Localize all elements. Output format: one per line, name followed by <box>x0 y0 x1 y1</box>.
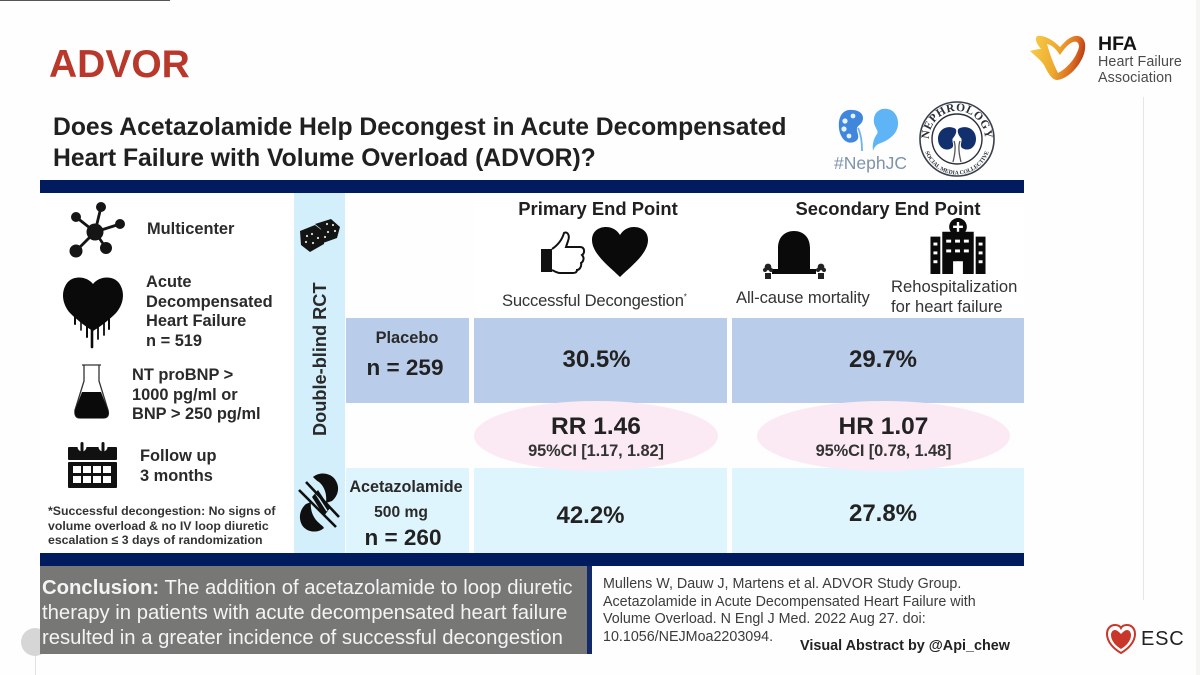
text: conclusion: resulted in a greater incidence of successful decongestion <box>42 627 563 649</box>
icon: dice <box>300 219 340 252</box>
text: follow up <box>140 447 216 485</box>
label: Rehospitalization for heart failure: Rehospitalization <box>891 277 1017 296</box>
text: 95%CI secondary: 95%CI [0.78, 1.48] <box>816 442 951 460</box>
logo text: Heart Failure Association <box>1098 54 1182 86</box>
panel: endpoint headers <box>474 193 1024 317</box>
text: acute decompensated heart failure: Heart Failure <box>146 312 246 330</box>
icon: tombstone <box>763 231 826 279</box>
row: acetazolamide <box>346 468 1024 553</box>
icon: ESC heart <box>1106 624 1136 654</box>
value: RR 1.46: RR 1.46 <box>551 413 641 440</box>
seal kidneys <box>938 127 976 150</box>
icon: heart <box>592 227 648 277</box>
text: NT proBNP criteria: BNP > 250 pg/ml <box>132 405 261 423</box>
icon: flask <box>74 364 110 419</box>
logo: Heart Failure Association <box>1030 33 1182 86</box>
text: 95%CI primary: 95%CI [1.17, 1.82] <box>528 442 664 460</box>
text: visual abstract credit: Visual Abstract by @Api_chew <box>800 638 1010 654</box>
heading: Primary End Point: Primary End Point <box>518 198 678 219</box>
text: acute decompensated heart failure <box>146 273 273 350</box>
slide frame lines <box>1143 97 1144 600</box>
logo: NephJC <box>834 108 907 173</box>
footnote: successful decongestion definition: *Successful decongestion: No signs of <box>48 504 276 518</box>
text: NT proBNP criteria <box>132 366 261 423</box>
text: NT proBNP criteria: NT proBNP > <box>132 366 233 384</box>
logo: Nephrology Social Media Collective seal <box>919 101 995 177</box>
icon: crossed-out pills <box>298 474 340 532</box>
logo text: ESC: ESC <box>1141 628 1185 650</box>
text: conclusion <box>42 577 573 649</box>
title: Heart Failure with Volume Overload (ADVOR)? <box>53 145 596 172</box>
cell: placebo secondary <box>732 318 1024 403</box>
value: 42.2%: 42.2% <box>556 502 625 529</box>
logo text: Heart Failure Association: Association <box>1098 70 1172 86</box>
icon: dripping heart <box>63 278 123 348</box>
text: conclusion: Conclusion: The addition of acetazolamide to loop diuretic <box>42 577 573 599</box>
panel: study population <box>40 193 294 553</box>
text: NT proBNP criteria: 1000 pg/ml or <box>132 386 238 404</box>
text: citation: Acetazolamide in Acute Decompensated Heart Failure with <box>603 594 976 610</box>
callout: HR secondary <box>757 401 1010 471</box>
seal bottom text: SOCIAL MEDIA COLLECTIVE <box>926 150 989 174</box>
label: All-cause mortality: All-cause mortality <box>736 288 870 307</box>
icon: hospital <box>930 218 986 274</box>
value: 30.5%: 30.5% <box>562 346 631 373</box>
text: follow up: Follow up <box>140 447 216 465</box>
value: HR 1.07: HR 1.07 <box>839 413 928 440</box>
cell: placebo primary <box>474 318 727 403</box>
text: Placebo: Placebo <box>376 329 438 347</box>
decorative player dot <box>21 628 49 656</box>
icon: thumbs up <box>541 232 586 274</box>
logo: ESC <box>1106 624 1185 654</box>
text: Multicenter: Multicenter <box>147 220 234 238</box>
cell: placebo arm <box>346 318 469 403</box>
heading: ADVOR: ADVOR <box>49 43 190 86</box>
text: citation: 10.1056/NEJMoa2203094. <box>603 629 773 645</box>
icon: HFA heart <box>1030 36 1086 80</box>
value: 27.8%: 27.8% <box>849 500 917 527</box>
label: Rehospitalization for heart failure: for heart failure <box>891 297 1003 316</box>
cell: acetazolamide secondary <box>732 468 1024 553</box>
text: Double-blind RCT (rotated): Double-blind RCT <box>310 282 330 436</box>
text: Acetazolamide: Acetazolamide <box>349 478 463 496</box>
callout: RR primary <box>474 401 718 471</box>
text: citation <box>603 576 976 645</box>
navy bar top <box>40 180 1024 193</box>
cell: acetazolamide arm <box>346 468 469 553</box>
logo text: HFA: HFA <box>1098 33 1137 55</box>
text: acute decompensated heart failure: Acute <box>146 273 192 291</box>
heading: Secondary End Point: Secondary End Point <box>796 198 980 219</box>
footnote: successful decongestion definition: escalation ≤ 3 days of randomization <box>48 533 262 547</box>
panel: double-blind RCT column <box>294 193 345 553</box>
text: follow up: 3 months <box>140 467 213 485</box>
text: acute decompensated heart failure: Decompensated <box>146 293 273 311</box>
footnote: successful decongestion definition: volume overload & no IV loop diuretic <box>48 519 269 533</box>
label: Rehospitalization for heart failure <box>891 277 1017 316</box>
label: Successful Decongestion: Successful Decongestion* <box>502 291 687 310</box>
icon: network <box>70 202 125 258</box>
text: citation: Mullens W, Dauw J, Martens et al. ADVOR Study Group. <box>603 576 961 592</box>
row: placebo <box>346 318 1024 403</box>
seal top text: NEPHROLOGY <box>921 104 993 139</box>
title <box>53 114 786 172</box>
icon: kidneys <box>838 108 898 151</box>
navy bar bottom <box>40 553 1024 566</box>
cell: acetazolamide primary <box>474 468 727 553</box>
text: n = 259: n = 259 <box>367 355 443 380</box>
value: 29.7%: 29.7% <box>849 346 917 373</box>
text: acute decompensated heart failure: n = 519 <box>146 332 202 350</box>
text: 500 mg: 500 mg <box>374 504 428 521</box>
logo text: #NephJC: #NephJC <box>834 153 907 173</box>
title: Does Acetazolamide Help Decongest in Acute Decompensated <box>53 114 786 141</box>
text: citation: Volume Overload. N Engl J Med. 2022 Aug 27. doi: <box>603 611 926 627</box>
panel: conclusion <box>40 566 592 654</box>
logo text: Heart Failure Association: Heart Failure <box>1098 54 1182 70</box>
icon: calendar <box>68 442 117 488</box>
text: n = 260: n = 260 <box>365 525 441 550</box>
text: conclusion: therapy in patients with acute decompensated heart failure <box>42 602 567 624</box>
footnote: successful decongestion definition <box>48 504 276 547</box>
